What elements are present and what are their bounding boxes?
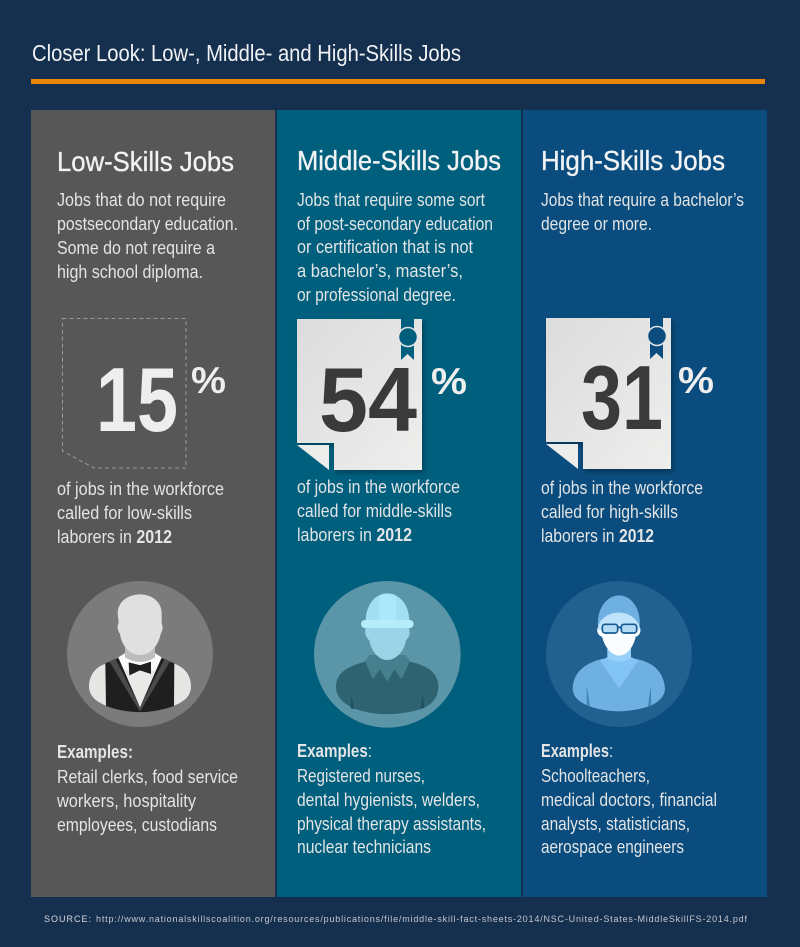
- panel: high-skills jobs: [523, 110, 767, 897]
- document with ribbon and 54 percent: [297, 319, 467, 470]
- icon: surgeon: [546, 581, 692, 727]
- icon: waiter: [67, 581, 213, 727]
- share text: high-skills: laborers in 2012: [541, 526, 654, 546]
- description: low-skills: Some do not require a: [57, 238, 216, 258]
- document outline with 15 percent: %: [191, 360, 226, 401]
- description: low-skills: [57, 190, 238, 282]
- description: middle-skills: of post-secondary education: [297, 214, 493, 234]
- panel: low-skills jobs: [31, 110, 275, 897]
- description: high-skills: degree or more.: [541, 214, 652, 234]
- share text: middle-skills: [297, 477, 460, 545]
- examples: middle-skills: dental hygienists, welders,: [297, 790, 480, 810]
- title: Closer Look: Low-, Middle- and High-Skills Jobs: [32, 40, 461, 66]
- examples: low-skills: Retail clerks, food service: [57, 767, 238, 787]
- document outline with 15 percent: 15: [96, 350, 178, 451]
- share text: low-skills: called for low-skills: [57, 503, 192, 523]
- examples: low-skills: employees, custodians: [57, 815, 217, 835]
- share text: high-skills: called for high-skills: [541, 502, 678, 522]
- description: middle-skills: or certification that is not: [297, 237, 473, 257]
- panel: middle-skills jobs: [277, 110, 521, 897]
- document outline with 15 percent: [62, 318, 226, 468]
- description: high-skills: [541, 190, 744, 234]
- share text: high-skills: of jobs in the workforce: [541, 478, 703, 498]
- description: low-skills: Jobs that do not require: [57, 190, 226, 210]
- description: low-skills: postsecondary education.: [57, 214, 238, 234]
- description: middle-skills: or professional degree.: [297, 285, 456, 305]
- heading: middle-skills: Middle-Skills Jobs: [297, 145, 501, 176]
- share text: middle-skills: laborers in 2012: [297, 525, 412, 545]
- examples: low-skills: [56, 742, 238, 835]
- description: low-skills: high school diploma.: [57, 262, 203, 282]
- examples: middle-skills: Examples:: [297, 741, 372, 761]
- examples: high-skills: Examples:: [541, 741, 613, 761]
- document with ribbon and 54 percent: %: [431, 361, 467, 402]
- examples: middle-skills: Registered nurses,: [297, 766, 425, 786]
- examples: low-skills: workers, hospitality: [56, 791, 196, 811]
- description: middle-skills: a bachelor’s, master’s,: [297, 261, 463, 281]
- description: high-skills: Jobs that require a bachelor’s: [541, 190, 744, 210]
- source line: SOURCE:: [44, 914, 91, 924]
- document with ribbon and 54 percent: 54: [319, 350, 417, 451]
- document with ribbon and 31 percent: [546, 318, 714, 469]
- examples: middle-skills: [297, 741, 486, 857]
- examples: high-skills: analysts, statisticians,: [541, 814, 690, 834]
- examples: high-skills: [541, 741, 717, 857]
- heading: low-skills: Low-Skills Jobs: [57, 146, 234, 177]
- examples: high-skills: aerospace engineers: [541, 837, 684, 857]
- icon: construction worker: [314, 581, 461, 728]
- heading: high-skills: High-Skills Jobs: [541, 145, 725, 176]
- share text: low-skills: laborers in 2012: [57, 527, 172, 547]
- examples: high-skills: medical doctors, financial: [541, 790, 717, 810]
- document with ribbon and 31 percent: %: [678, 360, 714, 401]
- description: middle-skills: Jobs that require some sort: [297, 190, 485, 210]
- share text: middle-skills: of jobs in the workforce: [297, 477, 460, 497]
- examples: low-skills: Examples:: [57, 742, 133, 762]
- examples: middle-skills: nuclear technicians: [297, 837, 431, 857]
- share text: low-skills: of jobs in the workforce: [57, 479, 224, 499]
- orange title rule: [31, 79, 765, 84]
- examples: middle-skills: physical therapy assistants,: [297, 814, 486, 834]
- share text: low-skills: [57, 479, 224, 547]
- examples: high-skills: Schoolteachers,: [541, 766, 650, 786]
- source line: http://www.nationalskillscoalition.org/resources/publications/file/middle-skill-fact-sheets-2014/NSC-United-States-MiddleSkillFS-2014.pdf: [96, 914, 747, 924]
- share text: middle-skills: called for middle-skills: [297, 501, 452, 521]
- description: middle-skills: [297, 190, 493, 305]
- document with ribbon and 31 percent: 31: [581, 348, 663, 449]
- share text: high-skills: [541, 478, 703, 546]
